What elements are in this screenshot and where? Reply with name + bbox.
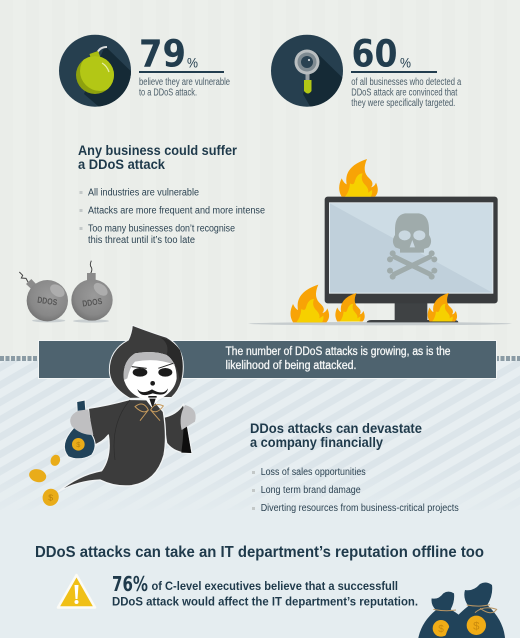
text: 79% description: to a DDoS attack.: [139, 88, 197, 98]
illustration: masked ghost with money bag: $: [76, 440, 80, 449]
flame: bottom left: [290, 285, 329, 322]
mask: [124, 352, 177, 407]
banner text: The number of DDoS attacks is growing, as is the: [226, 346, 450, 358]
text: 76% statistic: of C-level executives believe that a successfull: [152, 581, 398, 593]
percent sign: %: [187, 56, 198, 70]
coins: [49, 453, 62, 467]
text: 76% statistic: [112, 572, 418, 608]
stat: 60%: [271, 34, 462, 108]
section: devastate financially: [250, 420, 459, 514]
illustration: masked ghost with money bag: [28, 325, 196, 508]
heading: Any business could suffer: [78, 142, 237, 158]
section: any business could suffer: [78, 142, 266, 246]
money bag: [64, 400, 95, 459]
illustration: money bags: [418, 583, 505, 638]
heading: DDos attacks can devastate: [250, 420, 422, 436]
bullet list: [252, 467, 459, 514]
text: 60% description: [351, 77, 462, 109]
text: 60% description: they were specifically targeted.: [351, 98, 455, 109]
icon: warning triangle: [58, 575, 95, 608]
rope bow: [135, 404, 163, 421]
heading: reputation offline: DDoS attacks can take an IT department’s reputation offline too: [35, 544, 484, 561]
stat: 79%: [59, 34, 230, 107]
illustration: DDoS bombs: [19, 261, 113, 323]
bullet list: Too many businesses don’t recognise: [88, 223, 235, 234]
text: 79% description: believe they are vulnerable: [139, 77, 230, 88]
illustration: money bags: $: [473, 621, 480, 633]
text: 60% description: of all businesses who detected a: [351, 77, 462, 88]
flame: bottom right: [428, 293, 457, 321]
text: 76% statistic: DDoS attack would affect the IT department’s reputation.: [112, 596, 418, 608]
illustration: DDoS bombs: DDOS: [37, 295, 58, 307]
value: 79%: 79: [139, 32, 186, 76]
bullet list: Loss of sales opportunities: [261, 467, 366, 478]
hood: [109, 325, 183, 398]
value: 60%: 60: [352, 32, 398, 76]
flame: top: [339, 159, 378, 197]
heading: a DDoS attack: [78, 156, 165, 172]
heading: a company financially: [250, 434, 383, 450]
bullet list: Attacks are more frequent and more intense: [88, 205, 266, 216]
text: 79% description: [139, 77, 230, 98]
gloves: [70, 409, 93, 435]
heading: [250, 420, 422, 450]
text: 76% statistic: 76%: [112, 572, 148, 596]
rule: [139, 71, 224, 73]
illustration: money bags: $: [438, 624, 444, 635]
ghost body: [58, 399, 166, 492]
percent sign: %: [400, 56, 411, 70]
text: 60% description: DDoS attack are convinced that: [351, 88, 458, 98]
illustration: monitor on fire: [248, 159, 512, 325]
banner: number of attacks is growing: [38, 340, 496, 378]
bullet list: All industries are vulnerable: [88, 187, 199, 198]
bullet list: this threat until it’s too late: [88, 235, 196, 246]
rule: [351, 71, 437, 73]
bullet list: Long term brand damage: [261, 485, 361, 496]
flame: bottom middle: [335, 293, 365, 321]
bullet list: Diverting resources from business-critical projects: [261, 503, 459, 514]
skull: [387, 213, 437, 280]
illustration: masked ghost with money bag: $: [48, 493, 53, 503]
bullet list: [80, 187, 266, 246]
illustration: DDoS bombs: DDOS: [82, 296, 103, 309]
icon: bomb: [59, 34, 131, 107]
banner text: [226, 346, 450, 372]
floor shadow: [248, 322, 512, 325]
monitor stand: [367, 303, 458, 322]
screen: [329, 202, 493, 294]
monitor: [325, 197, 498, 303]
banner text: likelihood of being attacked.: [226, 360, 356, 372]
ghost sleeve: right: [163, 404, 192, 453]
icon: webcam: [271, 34, 343, 107]
heading: [78, 142, 237, 172]
